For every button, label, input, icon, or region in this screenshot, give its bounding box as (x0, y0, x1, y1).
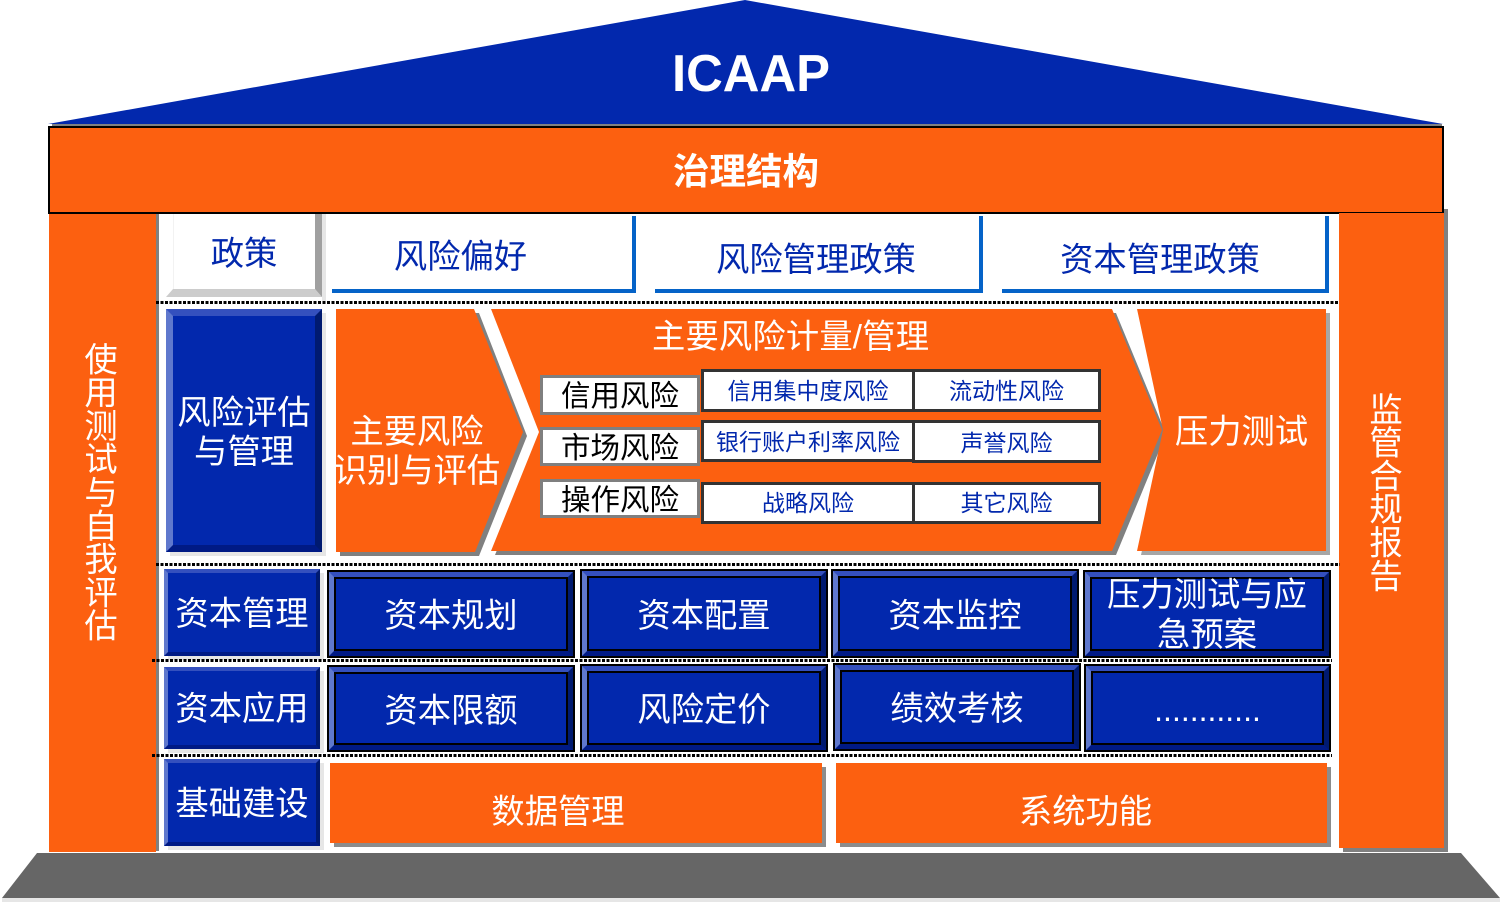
risk cell: strategic (701, 482, 915, 524)
policy: risk management policy (655, 216, 981, 291)
row label: infrastructure: 基础建设 (175, 786, 309, 822)
box: risk pricing (582, 666, 826, 750)
roof (48, 0, 1443, 127)
risk label: credit: 信用风险 (561, 380, 679, 413)
orange bar: data management: 数据管理 (491, 794, 625, 831)
box: risk pricing: 风险定价 (637, 692, 771, 729)
arrow: main risk measurement and management (491, 309, 1166, 555)
orange bar: system functions (836, 763, 1331, 847)
risk cell: liquidity (912, 369, 1101, 412)
governance bar (48, 126, 1444, 214)
risk label: operational: 操作风险 (561, 484, 679, 516)
arrow: risk identification and assessment: 识别与评估 (334, 453, 500, 490)
row label: infrastructure (164, 759, 320, 846)
box: capital planning: 资本规划 (384, 598, 518, 635)
risk cell: banking book interest rate (701, 420, 915, 462)
left pillar (49, 214, 156, 852)
box: performance assessment (835, 665, 1079, 749)
row label: capital application (164, 667, 320, 749)
label: risk assessment and management: 与管理 (194, 434, 294, 470)
row label: capital application: 资本应用 (175, 691, 309, 728)
risk cell: credit concentration: 信用集中度风险 (728, 378, 888, 404)
box: capital allocation: 资本配置 (637, 598, 771, 634)
label: risk assessment and management (166, 309, 322, 552)
box: capital limits (329, 667, 573, 750)
box: capital monitoring (833, 571, 1077, 656)
policy: risk management policy: 风险管理政策 (716, 242, 916, 279)
risk cell: strategic: 战略风险 (762, 490, 854, 516)
box: stress testing and contingency (1085, 572, 1329, 656)
policy: risk appetite (332, 216, 634, 291)
left pillar: 使用测试与自我评估 (78, 342, 116, 642)
orange bar: data management (330, 763, 826, 847)
risk cell: reputation (912, 420, 1101, 463)
box: capital allocation (582, 571, 826, 656)
risk cell: banking book interest rate: 银行账户利率风险 (716, 429, 900, 455)
risk cell: credit concentration (701, 369, 915, 412)
orange bar: system functions: 系统功能 (1019, 794, 1152, 831)
risk label: operational (540, 479, 700, 518)
arrow: stress testing: 压力测试 (1175, 414, 1308, 451)
box: capital planning (329, 572, 573, 656)
roof: ICAAP (672, 45, 830, 103)
policy label bevel (166, 213, 326, 301)
right pillar (1339, 213, 1444, 848)
risk cell: other: 其它风险 (960, 490, 1052, 516)
box: stress testing and contingency: 急预案 (1157, 616, 1257, 654)
policy: capital management policy: 资本管理政策 (1060, 242, 1260, 279)
box: ellipsis: ............ (1154, 692, 1261, 728)
arrow: risk identification and assessment (334, 309, 527, 556)
risk cell: other (912, 482, 1101, 524)
label: risk assessment and management: 风险评估 (177, 394, 311, 432)
policy: risk appetite: 风险偏好 (394, 239, 527, 276)
box: ellipsis (1086, 666, 1329, 750)
risk label: market: 市场风险 (561, 432, 679, 464)
arrow: stress testing (1137, 309, 1330, 555)
risk label: market (540, 427, 700, 466)
risk label: credit (540, 375, 700, 415)
right pillar: 监管合规报告 (1364, 392, 1400, 591)
box: performance assessment: 绩效考核 (890, 691, 1024, 728)
risk cell: reputation: 声誉风险 (960, 430, 1052, 456)
arrow: risk identification and assessment: 主要风险 (350, 414, 484, 451)
row label: capital management: 资本管理 (175, 596, 309, 632)
policy label bevel: 政策 (211, 236, 277, 273)
box: capital monitoring: 资本监控 (888, 598, 1022, 634)
governance bar: 治理结构 (673, 151, 819, 192)
pillar shadows (155, 209, 1448, 852)
risk cell: liquidity: 流动性风险 (949, 378, 1064, 404)
base floor (2, 853, 1500, 902)
box: stress testing and contingency: 压力测试与应 (1107, 576, 1307, 614)
arrow: main risk measurement and management: 主要风险计量/管理 (652, 319, 929, 356)
box: capital limits: 资本限额 (384, 692, 518, 730)
row label: capital management (164, 569, 320, 656)
policy: capital management policy (1002, 216, 1327, 291)
